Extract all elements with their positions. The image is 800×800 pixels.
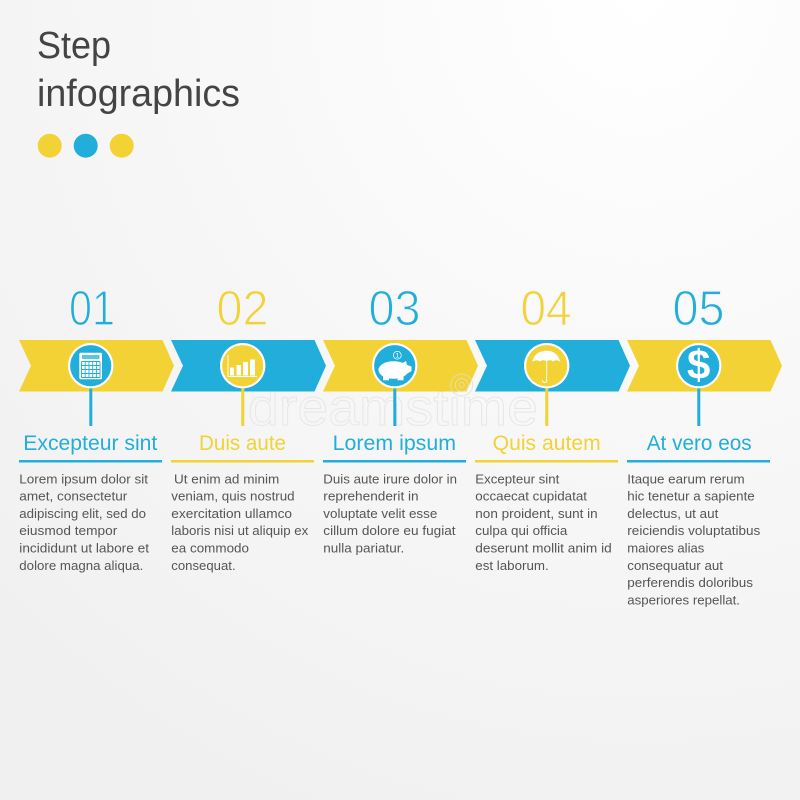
- text block 4: Excepteur sint: [475, 471, 560, 486]
- number 02: 02: [216, 282, 268, 336]
- text block 4: occaecat cupidatat: [475, 489, 587, 504]
- connector 5: [697, 386, 700, 426]
- number 05: 05: [672, 282, 724, 336]
- icon: dollar: $: [687, 341, 710, 388]
- watermark: dreamstime: [248, 379, 538, 437]
- text block 4: deserunt mollit anim id: [475, 540, 612, 556]
- text block 4: est laborum.: [475, 558, 549, 573]
- underline 4: [475, 460, 618, 462]
- text block 3: voluptate velit esse: [323, 506, 437, 521]
- number 03: 03: [368, 282, 420, 336]
- text block 5: maiores alias: [627, 540, 705, 556]
- title: [37, 25, 240, 115]
- icon: dollar: [676, 341, 721, 388]
- text block 2: [171, 471, 309, 573]
- text block 3: cillum dolore eu fugiat: [323, 523, 456, 538]
- label 5: At vero eos: [647, 432, 752, 455]
- icon: calculator: [68, 343, 113, 388]
- text block 4: [475, 471, 612, 573]
- arrow 3: [323, 340, 478, 392]
- title dots: [38, 134, 134, 158]
- text block 3: nulla pariatur.: [323, 540, 404, 556]
- text block 1: dolore magna aliqua.: [19, 558, 143, 573]
- text block 3: reprehenderit in: [323, 489, 419, 504]
- icon: umbrella: [524, 343, 569, 388]
- text block 4: non proident, sunt in: [475, 506, 598, 521]
- text block 1: adipiscing elit, sed do: [19, 506, 146, 521]
- text block 2: ea commodo: [171, 540, 249, 556]
- text block 2: exercitation ullamco: [171, 506, 292, 521]
- text block 5: reiciendis voluptatibus: [627, 523, 761, 538]
- text block 4: culpa qui officia: [475, 523, 568, 538]
- underline 1: [19, 460, 162, 462]
- number 01: 01: [69, 282, 115, 336]
- arrow 2: [171, 340, 326, 392]
- title: infographics: [37, 73, 240, 115]
- connector 1: [89, 386, 92, 426]
- text block 5: perferendis doloribus: [627, 575, 754, 590]
- watermark spiral: [451, 374, 473, 396]
- text block 2: veniam, quis nostrud: [171, 489, 295, 504]
- step 4: [475, 282, 630, 573]
- text block 2: consequat.: [171, 558, 236, 573]
- text block 3: [323, 471, 457, 556]
- text block 1: [19, 471, 149, 573]
- number 04: 04: [520, 282, 572, 336]
- underline 2: [171, 460, 314, 462]
- label 4: Quis autem: [493, 432, 601, 455]
- arrow 4: [475, 340, 630, 392]
- text block 5: consequatur aut: [627, 558, 723, 573]
- label 3: Lorem ipsum: [333, 432, 456, 455]
- icon: bar chart: [220, 343, 265, 388]
- text block 5: delectus, ut aut: [627, 506, 719, 521]
- icon: piggy bank: [372, 343, 417, 388]
- connector 2: [241, 386, 244, 426]
- text block 1: amet, consectetur: [19, 489, 128, 504]
- connector 4: [545, 386, 548, 426]
- text block 5: [627, 471, 761, 607]
- underline 5: [627, 460, 770, 462]
- underline 3: [323, 460, 466, 462]
- step 3: [323, 282, 478, 556]
- text block 2: laboris nisi ut aliquip ex: [171, 523, 309, 538]
- text block 3: Duis aute irure dolor in: [323, 471, 457, 486]
- text block 2: Ut enim ad minim: [174, 471, 279, 486]
- text block 5: hic tenetur a sapiente: [627, 489, 755, 504]
- step 5: [627, 282, 782, 607]
- step 1: [19, 282, 174, 573]
- arrow 1: [19, 340, 174, 392]
- title: Step: [37, 25, 111, 67]
- text block 1: incididunt ut labore et: [19, 540, 149, 556]
- step 2: [171, 282, 326, 573]
- text block 5: Itaque earum rerum: [627, 471, 745, 486]
- icon: piggy bank: 1: [395, 353, 399, 360]
- label 1: Excepteur sint: [23, 432, 157, 455]
- text block 1: eiusmod tempor: [19, 523, 118, 538]
- text block 1: Lorem ipsum dolor sit: [19, 471, 148, 486]
- text block 5: asperiores repellat.: [627, 592, 740, 607]
- arrow 5: [627, 340, 782, 392]
- label 2: Duis aute: [199, 432, 286, 455]
- connector 3: [393, 386, 396, 426]
